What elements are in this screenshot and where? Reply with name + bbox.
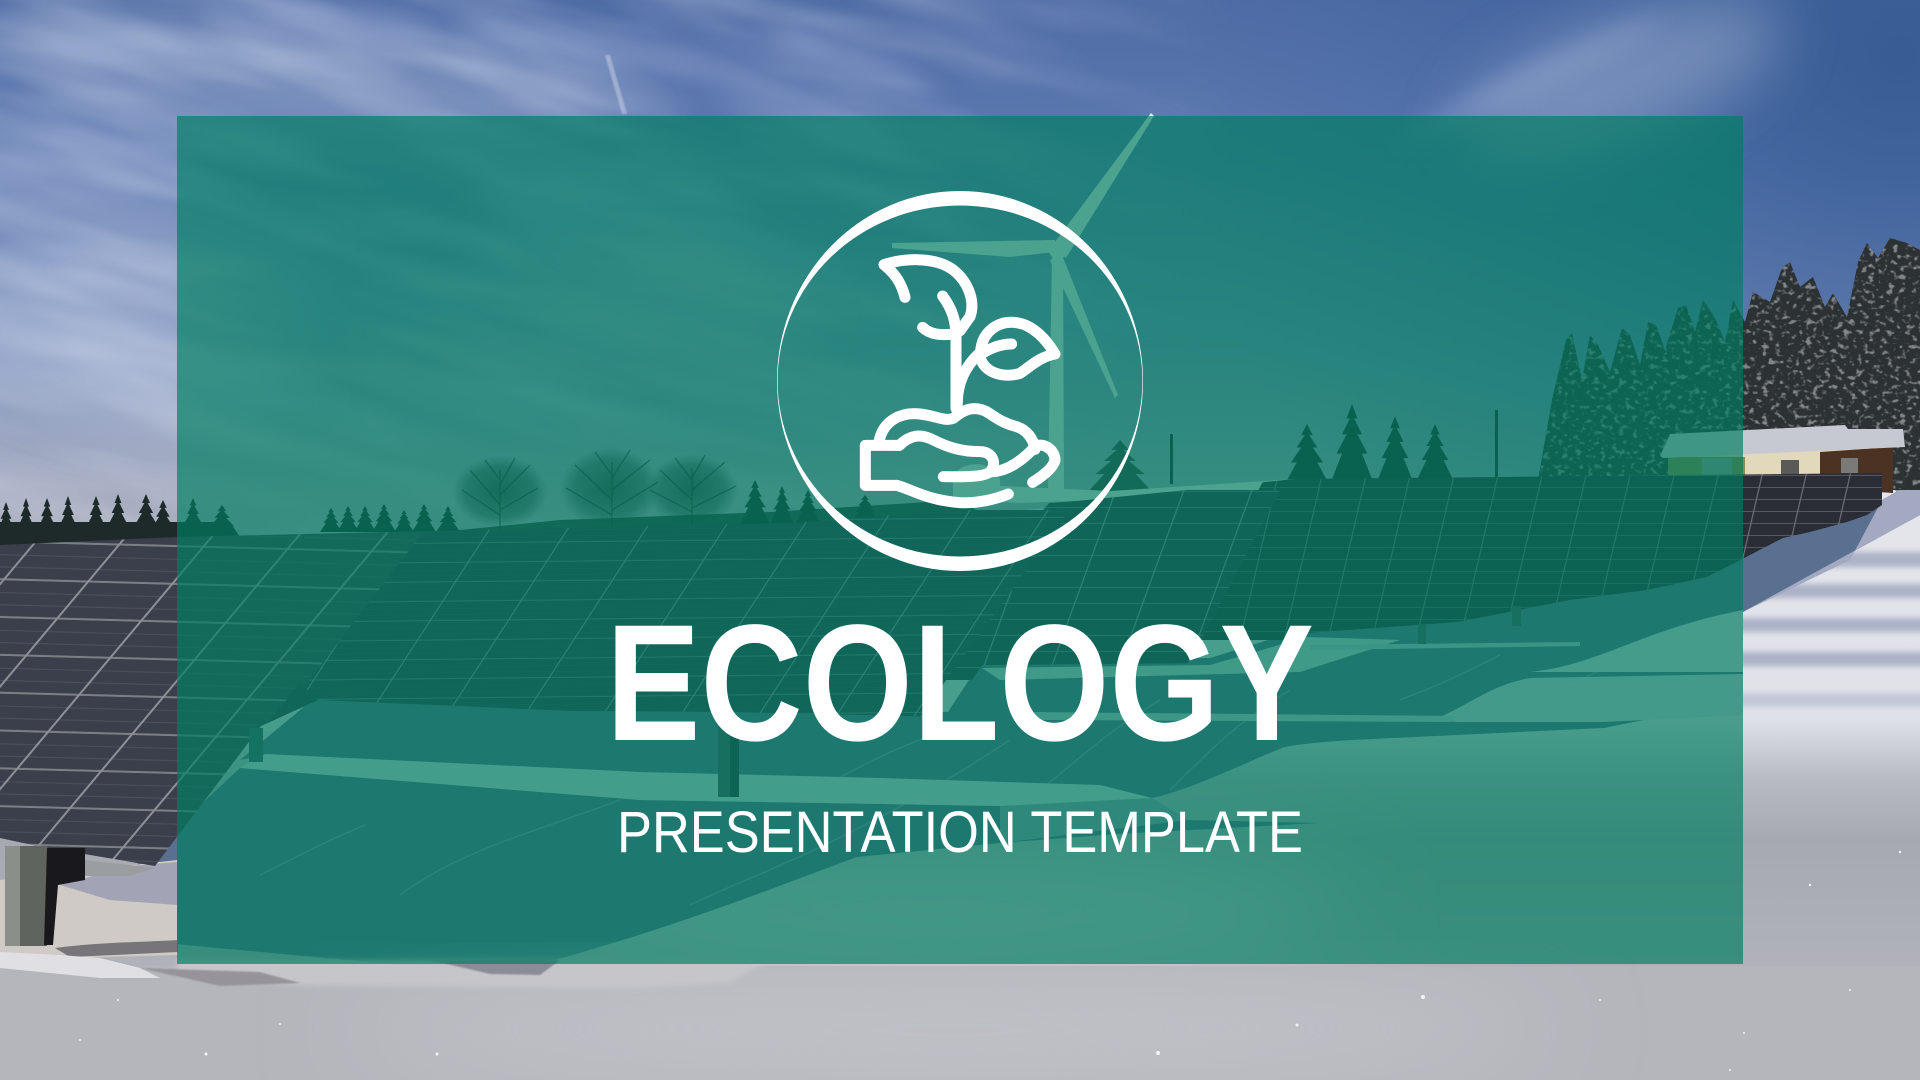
subtitle: PRESENTATION TEMPLATE — [617, 800, 1303, 865]
snow ground — [0, 478, 1920, 1080]
distant tree line and bare trees — [0, 404, 1498, 546]
right pine forest — [1530, 230, 1920, 495]
circular emblem ring — [777, 191, 1143, 571]
green translucent panel — [177, 116, 1743, 964]
title: ECOLOGY — [606, 591, 1314, 776]
wind turbine — [892, 113, 1295, 503]
snow sparkles — [79, 851, 1901, 1071]
icon: seedling in hand — [865, 260, 1055, 503]
panel support post — [5, 846, 155, 946]
house — [1660, 425, 1905, 493]
solar panel array — [0, 470, 1920, 880]
